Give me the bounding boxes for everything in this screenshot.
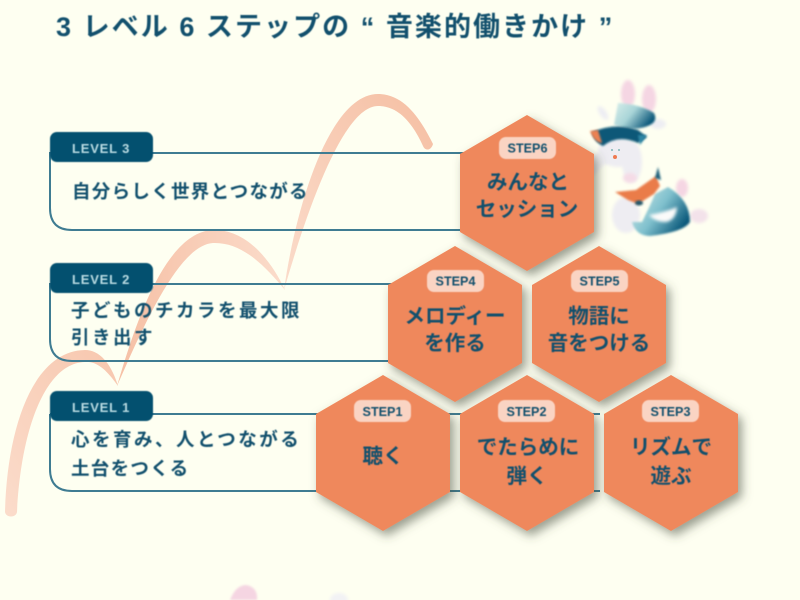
lower character: [612, 167, 708, 236]
level 1 text: 心を育み、人とつながる: [71, 429, 301, 450]
upper character: [581, 80, 666, 183]
step 4 label: メロディー: [404, 304, 506, 328]
level 2 tab: [50, 263, 153, 293]
level 2 tab: LEVEL 2: [72, 272, 130, 287]
step 6 label: セッション: [476, 198, 578, 221]
step 4 badge: STEP4: [436, 274, 475, 288]
hexagon: step 2: [460, 375, 594, 531]
step 3 badge: [642, 400, 699, 422]
level 1 text: 土台をつくる: [71, 458, 189, 479]
step 1 badge: [354, 400, 411, 422]
hexagon: step 4: [388, 246, 522, 402]
step 2 badge: STEP2: [507, 405, 546, 419]
level 2 text: 子どものチカラを最大限: [71, 300, 302, 321]
level 1 tab: [50, 391, 153, 421]
bouncing arcs: [5, 94, 433, 516]
hexagon: step 5: [532, 246, 666, 402]
step 6 badge: STEP6: [508, 142, 547, 156]
level 1 tab: LEVEL 1: [72, 400, 130, 415]
step 2 label: 弾く: [506, 464, 548, 488]
step 6 label: みんなと: [487, 171, 569, 194]
step 4 badge: [427, 270, 484, 292]
step 5 label: 物語に: [568, 305, 630, 328]
level 3 tab: [50, 132, 153, 162]
panel: level 1: [50, 391, 600, 491]
characters illustration: [581, 80, 708, 236]
step 1 label: 聴く: [362, 445, 404, 468]
step 4 label: を作る: [424, 332, 486, 355]
step 3 label: 遊ぶ: [650, 464, 692, 488]
step 5 badge: STEP5: [580, 274, 619, 288]
step 2 badge: [498, 400, 555, 422]
panel: level 3: [50, 132, 470, 230]
panel: level 2: [50, 263, 400, 361]
hexagon: step 6: [460, 115, 594, 271]
step 1 badge: STEP1: [363, 405, 402, 419]
level 3 text: 自分らしく世界とつながる: [72, 181, 309, 202]
bottom character fragment: [230, 585, 348, 600]
hexagon: step 1: [316, 375, 450, 531]
step 2 label: でたらめに: [477, 436, 579, 459]
step 5 label: 音をつける: [548, 332, 650, 355]
step 3 label: リズムで: [630, 435, 712, 459]
step 3 badge: STEP3: [651, 405, 690, 419]
hexagon: step 3: [604, 375, 738, 531]
title: 3 レベル 6 ステップの “ 音楽的働きかけ ”: [56, 12, 614, 42]
step 6 badge: [499, 137, 556, 159]
level 2 text: 引き出す: [71, 327, 155, 348]
level 3 tab: LEVEL 3: [72, 141, 130, 156]
step 5 badge: [571, 270, 628, 292]
